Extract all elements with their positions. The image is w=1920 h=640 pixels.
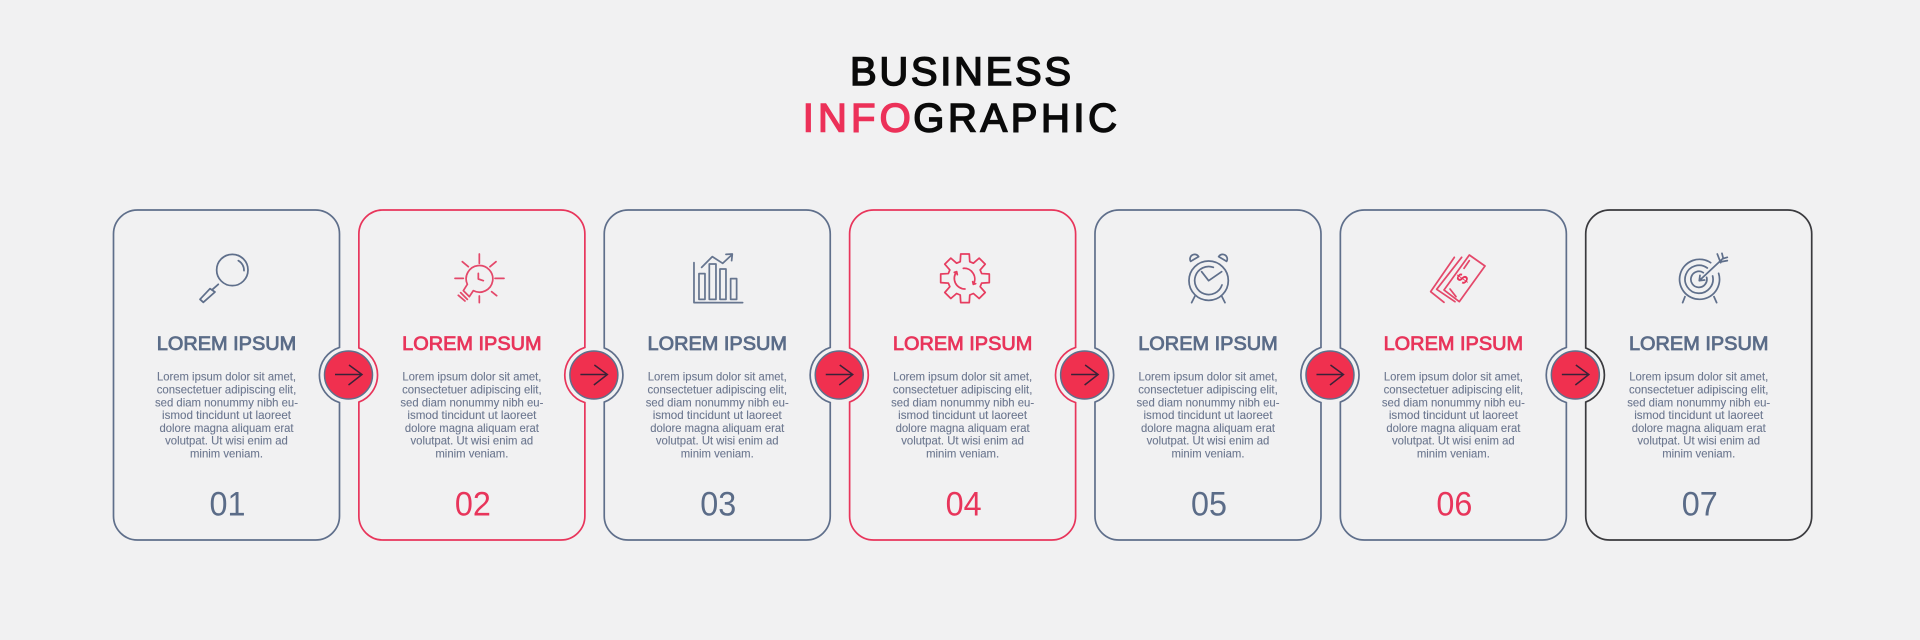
arrow button 2 <box>570 351 618 399</box>
heading: LOREM IPSUM <box>893 333 1032 355</box>
arrow button 5 <box>1306 351 1354 399</box>
body text: sed diam nonummy nibh eu- <box>1382 395 1525 409</box>
panel: step 04 <box>850 210 1076 540</box>
body text: consectetuer adipiscing elit, <box>893 382 1032 396</box>
body text: dolore magna aliquam erat <box>405 421 539 435</box>
step number: 05 <box>1191 486 1227 524</box>
icon: light bulb with clock <box>455 254 504 303</box>
card outline <box>1340 210 1566 540</box>
card outline <box>1586 210 1812 540</box>
body text: sed diam nonummy nibh eu- <box>1136 395 1279 409</box>
title: BUSINESS <box>850 50 1071 94</box>
heading: LOREM IPSUM <box>157 333 296 355</box>
body text: Lorem ipsum dolor sit amet, <box>402 370 541 384</box>
body text: minim veniam. <box>926 446 999 460</box>
panel: step 05 <box>1095 210 1321 540</box>
body text: volutpat. Ut wisi enim ad <box>411 434 533 448</box>
body text: Lorem ipsum dolor sit amet, <box>1629 370 1768 384</box>
step number: 04 <box>946 486 982 524</box>
body text: ismod tincidunt ut laoreet <box>898 408 1028 422</box>
card outline <box>1095 210 1321 540</box>
body text: minim veniam. <box>190 446 263 460</box>
body text: Lorem ipsum dolor sit amet, <box>648 370 787 384</box>
panel: step 07 <box>1586 210 1812 540</box>
step number: 01 <box>210 486 246 524</box>
body text: sed diam nonummy nibh eu- <box>891 395 1034 409</box>
title: INFO <box>803 97 911 141</box>
body text: minim veniam. <box>1171 446 1244 460</box>
body text: volutpat. Ut wisi enim ad <box>1392 434 1515 448</box>
body text: Lorem ipsum dolor sit amet, <box>893 370 1032 384</box>
card outline <box>850 210 1076 540</box>
body text <box>1136 370 1279 460</box>
body text: volutpat. Ut wisi enim ad <box>165 434 288 448</box>
card outline <box>359 210 585 540</box>
title: GRAPHIC <box>913 97 1117 141</box>
body text: minim veniam. <box>681 446 754 460</box>
body text: Lorem ipsum dolor sit amet, <box>1138 370 1277 384</box>
panel: step 01 <box>114 210 340 540</box>
body text: consectetuer adipiscing elit, <box>1384 382 1523 396</box>
panel: step 06 <box>1340 210 1566 540</box>
card outline <box>604 210 830 540</box>
arrow button 4 <box>1061 351 1109 399</box>
heading: LOREM IPSUM <box>647 333 787 355</box>
body text: consectetuer adipiscing elit, <box>402 382 542 396</box>
body text: ismod tincidunt ut laoreet <box>1634 408 1764 422</box>
body text: dolore magna aliquam erat <box>160 421 294 435</box>
step number: 03 <box>700 486 736 524</box>
body text: ismod tincidunt ut laoreet <box>162 408 292 422</box>
heading: LOREM IPSUM <box>402 333 542 355</box>
body text: volutpat. Ut wisi enim ad <box>656 434 779 448</box>
body text: dolore magna aliquam erat <box>1141 421 1276 435</box>
body text: ismod tincidunt ut laoreet <box>1389 408 1518 422</box>
body text: consectetuer adipiscing elit, <box>1138 382 1278 396</box>
body text: consectetuer adipiscing elit, <box>157 382 296 396</box>
step number: 06 <box>1436 486 1472 524</box>
heading: LOREM IPSUM <box>1384 333 1523 355</box>
body text: minim veniam. <box>1417 446 1490 460</box>
body text: volutpat. Ut wisi enim ad <box>901 434 1024 448</box>
card outline <box>114 210 340 540</box>
body text: sed diam nonummy nibh eu- <box>646 395 789 409</box>
body text: sed diam nonummy nibh eu- <box>1627 395 1770 409</box>
body text <box>1382 370 1525 460</box>
arrow button 6 <box>1551 351 1599 399</box>
step number: 07 <box>1682 486 1718 524</box>
icon: target with arrow <box>1680 253 1727 303</box>
step number: 02 <box>455 486 491 524</box>
body text: volutpat. Ut wisi enim ad <box>1147 434 1269 448</box>
body text: dolore magna aliquam erat <box>650 421 785 435</box>
body text: Lorem ipsum dolor sit amet, <box>1384 370 1523 384</box>
body text: ismod tincidunt ut laoreet <box>407 408 537 422</box>
body text: sed diam nonummy nibh eu- <box>155 395 298 409</box>
arrow button 3 <box>815 351 863 399</box>
panel: step 02 <box>359 210 585 540</box>
heading: LOREM IPSUM <box>1629 333 1768 355</box>
icon: magnifying glass <box>200 254 248 302</box>
body text <box>646 370 789 460</box>
icon: rising bar chart <box>694 254 743 303</box>
icon: banknotes: $ <box>1454 271 1473 288</box>
body text: volutpat. Ut wisi enim ad <box>1637 434 1760 448</box>
icon: alarm clock <box>1189 254 1228 303</box>
icon: gear with cycle arrows <box>941 254 989 303</box>
body text: minim veniam. <box>435 446 508 460</box>
body text <box>891 370 1034 460</box>
body text: dolore magna aliquam erat <box>1632 421 1766 435</box>
body text: ismod tincidunt ut laoreet <box>653 408 782 422</box>
body text: consectetuer adipiscing elit, <box>1629 382 1768 396</box>
body text: Lorem ipsum dolor sit amet, <box>157 370 296 384</box>
body text: dolore magna aliquam erat <box>896 421 1030 435</box>
panel: step 03 <box>604 210 830 540</box>
icon: banknotes <box>1431 255 1485 302</box>
body text: ismod tincidunt ut laoreet <box>1143 408 1273 422</box>
body text: sed diam nonummy nibh eu- <box>400 395 543 409</box>
body text <box>155 370 298 460</box>
body text: dolore magna aliquam erat <box>1386 421 1521 435</box>
body text <box>400 370 543 460</box>
heading: LOREM IPSUM <box>1138 333 1278 355</box>
body text <box>1627 370 1770 460</box>
title <box>803 50 1117 141</box>
body text: minim veniam. <box>1662 446 1735 460</box>
body text: consectetuer adipiscing elit, <box>647 382 787 396</box>
arrow button 1 <box>324 351 372 399</box>
